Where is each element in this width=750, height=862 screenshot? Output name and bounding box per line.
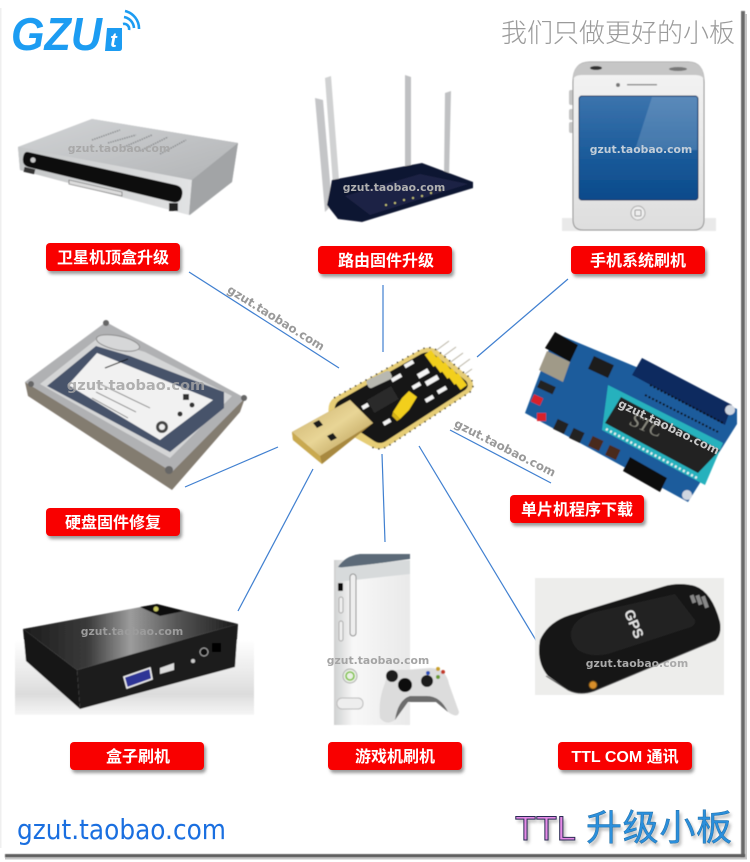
label: 硬盘固件修复: [46, 508, 182, 539]
product title: TTL 升级小板: [515, 807, 734, 851]
device: game console with controller: [334, 554, 459, 725]
product title: TTL 升级小板: TTL: [517, 813, 578, 851]
label: 单片机程序下载: 单片机程序下载: [521, 500, 633, 519]
icon: t badge: t: [110, 30, 118, 52]
watermark: gzut.taobao.com: [590, 143, 692, 156]
watermark: gzut.taobao.com: [616, 396, 722, 458]
watermark: gzut.taobao.com: [327, 654, 429, 667]
device: smartphone: [562, 62, 716, 231]
label: 盒子刷机: [70, 742, 206, 773]
device: hard disk: [25, 320, 247, 490]
device: TV box: [15, 604, 254, 715]
device: satellite set-top box: [18, 119, 238, 215]
connector lines: [185, 272, 568, 642]
product title: TTL 升级小板: 升级小板: [586, 807, 732, 848]
device: Bluetooth GPS: [535, 578, 724, 695]
website footer text: gzut.taobao.com: [17, 813, 226, 846]
label: 单片机程序下载: [510, 495, 646, 526]
watermark: gzut.taobao.com: [67, 377, 205, 394]
pin header: [430, 341, 472, 379]
device: microcontroller board: [525, 332, 737, 502]
label: 路由固件升级: [318, 246, 454, 277]
watermark: gzut.taobao.com: [343, 181, 445, 194]
label: TTL COM 通讯: TTL COM 通讯: [571, 748, 679, 766]
label: 盒子刷机: 盒子刷机: [106, 747, 170, 766]
watermark: gzut.taobao.com: [68, 142, 170, 155]
label: 游戏机刷机: [328, 742, 464, 773]
device: microcontroller board: STC: [627, 410, 666, 442]
watermark: gzut.taobao.com: [452, 416, 558, 480]
label: 路由固件升级: 路由固件升级: [338, 251, 434, 270]
watermark: gzut.taobao.com: [586, 657, 688, 670]
label: TTL COM 通讯: [558, 742, 694, 773]
label: 手机系统刷机: 手机系统刷机: [590, 251, 686, 270]
slogan heading: 我们只做更好的小板: [501, 13, 735, 50]
label: 卫星机顶盒升级: 卫星机顶盒升级: [57, 248, 169, 267]
device: router: [315, 75, 473, 222]
logo: GZUt: GZU: [11, 8, 104, 60]
label: 游戏机刷机: 游戏机刷机: [355, 747, 435, 766]
rotated watermark: gzut.taobao.com: [225, 282, 327, 354]
device: Bluetooth GPS: GPS: [621, 607, 647, 641]
product title: TTL 升级小板: TTL: [515, 810, 576, 848]
watermark: gzut.taobao.com: [81, 625, 183, 638]
product title: TTL 升级小板: 升级小板: [588, 810, 734, 851]
device: USB TTL module: [292, 341, 473, 464]
label: 手机系统刷机: [571, 246, 707, 277]
label: 卫星机顶盒升级: [46, 243, 182, 274]
label: 硬盘固件修复: 硬盘固件修复: [65, 513, 161, 532]
